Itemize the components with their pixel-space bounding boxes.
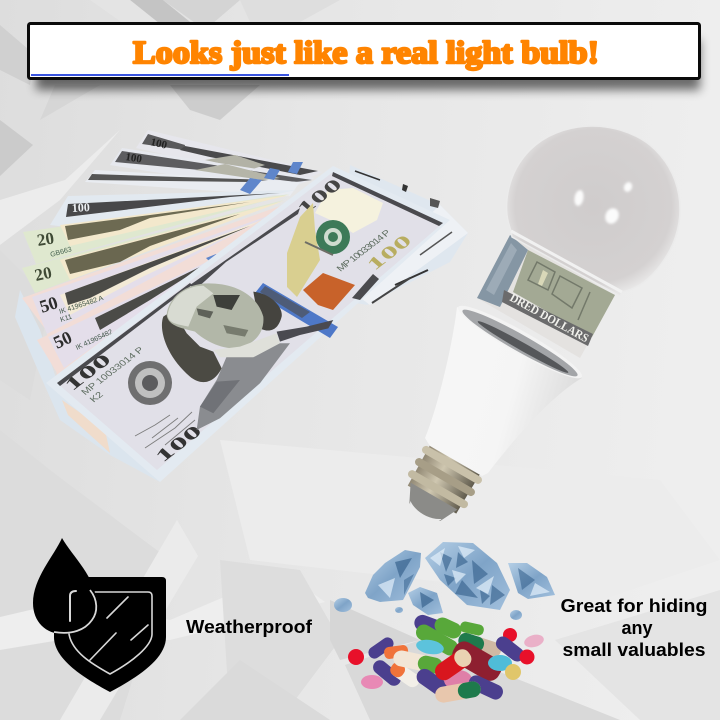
banknote fan bbox=[15, 130, 468, 482]
round treasury seal bbox=[128, 361, 172, 405]
DRED DOLLARS text: DRED DOLLARS bbox=[508, 290, 592, 345]
main 100 dollar note bbox=[46, 166, 450, 482]
dark engraved borders bbox=[57, 172, 443, 386]
note corner numerals and serials: 100 bbox=[61, 351, 116, 395]
glass dome bbox=[507, 126, 680, 296]
water drop bbox=[33, 538, 96, 634]
50 note lower bbox=[37, 255, 220, 378]
blue security ribbons on fan bbox=[206, 162, 303, 266]
label: Great for hiding any small valuables bbox=[560, 596, 708, 660]
100 note C bbox=[85, 170, 300, 196]
back stack of notes: left bbox=[15, 290, 160, 482]
label: Weatherproof: Weatherproof bbox=[186, 617, 313, 637]
20 note upper: GB663 bbox=[50, 246, 73, 259]
signatures bbox=[135, 412, 195, 448]
icon: weatherproof shield and water drop bbox=[33, 538, 166, 692]
collar bbox=[213, 333, 280, 357]
tiny diamonds bbox=[334, 598, 352, 612]
large diamond bbox=[425, 542, 510, 610]
100 note D bbox=[50, 190, 296, 232]
note corner numerals and serials bbox=[61, 173, 435, 470]
100 note A: 100 bbox=[149, 136, 169, 152]
pills and capsules bbox=[348, 613, 545, 704]
coat bbox=[197, 343, 290, 430]
50 note lower: 50 bbox=[50, 327, 75, 353]
20 note lower: 20 bbox=[33, 263, 53, 285]
20 note lower bbox=[22, 200, 284, 293]
rolled banknote bbox=[477, 235, 615, 358]
50 note upper bbox=[22, 206, 280, 375]
diamonds bbox=[334, 542, 555, 620]
note corner numerals and serials: 100 bbox=[363, 232, 417, 274]
100 note B bbox=[110, 148, 315, 192]
right diamond bbox=[508, 563, 555, 599]
note corner numerals and serials: 100 bbox=[293, 176, 347, 218]
50 note upper: IK 41965482 A bbox=[58, 295, 105, 316]
note corner numerals and serials: 100 bbox=[152, 422, 207, 466]
light bulb split open bbox=[391, 126, 680, 536]
label: Great for hiding any small valuables: any bbox=[621, 618, 653, 638]
note corner numerals and serials: MP 10033014 P bbox=[79, 345, 147, 397]
note corner numerals and serials: MP 10033014 P bbox=[335, 228, 394, 274]
screw thread base bbox=[391, 438, 487, 536]
dome highlights bbox=[573, 181, 634, 226]
50 note upper: K11 bbox=[59, 314, 73, 324]
small centre diamond bbox=[408, 587, 443, 615]
20 note upper bbox=[23, 194, 290, 264]
gold feather bbox=[287, 203, 320, 297]
100 note D: 100 bbox=[71, 200, 90, 215]
green seal bbox=[305, 220, 350, 255]
back stack of notes: right bbox=[340, 165, 468, 305]
left diamond bbox=[365, 550, 421, 602]
note corner numerals and serials: K2 bbox=[88, 390, 106, 405]
blue security ribbon bbox=[255, 283, 338, 338]
upper bulb section with rolled cash bbox=[477, 126, 680, 358]
orange bell patch bbox=[303, 273, 355, 310]
20 note upper: 20 bbox=[36, 229, 55, 250]
100 note B: 100 bbox=[125, 151, 143, 166]
scarf ribbon bbox=[277, 320, 333, 342]
label: Great for hiding any small valuables: small valuables bbox=[562, 640, 706, 660]
white shade bbox=[425, 307, 582, 476]
50 note upper: 50 bbox=[37, 292, 60, 317]
100 note A bbox=[136, 130, 322, 184]
Franklin portrait bbox=[162, 283, 333, 430]
title banner bbox=[28, 24, 700, 90]
face bbox=[167, 283, 263, 348]
50 note lower: IK 41965482 bbox=[75, 329, 114, 352]
title text: Looks just like a real light bulb! bbox=[133, 34, 599, 70]
hair bbox=[162, 310, 222, 382]
lower bulb section bbox=[391, 297, 587, 536]
label: Great for hiding any small valuables: Great for hiding bbox=[560, 596, 708, 616]
opening rim bbox=[453, 297, 587, 387]
